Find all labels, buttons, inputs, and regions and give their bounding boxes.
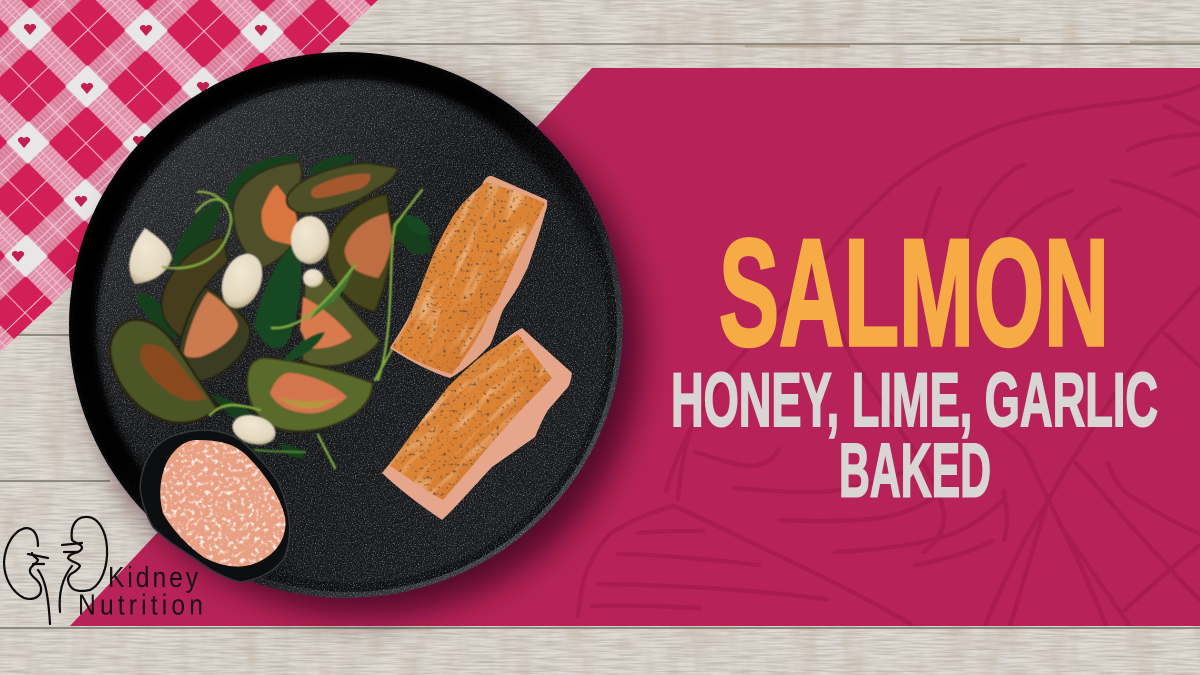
tomato wedge: lower center <box>247 358 373 431</box>
logo wordmark: Kidney: Kidney <box>108 561 199 593</box>
tomato and greens salad <box>110 155 432 468</box>
subheading line 2: BAKED <box>839 428 991 514</box>
mozzarella balls <box>129 216 329 449</box>
spinach leaves on top <box>254 215 430 362</box>
crimson title panel <box>70 68 1200 630</box>
Kidney Nutrition logo <box>4 517 203 624</box>
decorative salmon line art <box>578 86 1200 630</box>
arugula stems <box>163 190 422 468</box>
tomato wedge: top arc <box>233 162 302 268</box>
tomato wedge: right <box>327 194 392 312</box>
checkered napkin <box>0 0 380 352</box>
tomato wedge: lower right <box>300 271 380 366</box>
salmon fillet upper <box>390 176 548 378</box>
black plate with food <box>69 52 642 616</box>
heart motifs <box>12 24 267 262</box>
icon: kidneys <box>4 517 107 624</box>
tomato wedge: dark back <box>162 237 228 338</box>
tomato wedge: lower left <box>110 320 217 423</box>
bowl of pink salt <box>140 430 290 582</box>
tomato wedge: top right <box>287 163 398 213</box>
tomato wedge: center left <box>177 287 250 381</box>
salmon fillet lower <box>382 328 572 520</box>
greens behind <box>136 155 432 458</box>
logo wordmark: Nutrition: Nutrition <box>78 589 203 621</box>
